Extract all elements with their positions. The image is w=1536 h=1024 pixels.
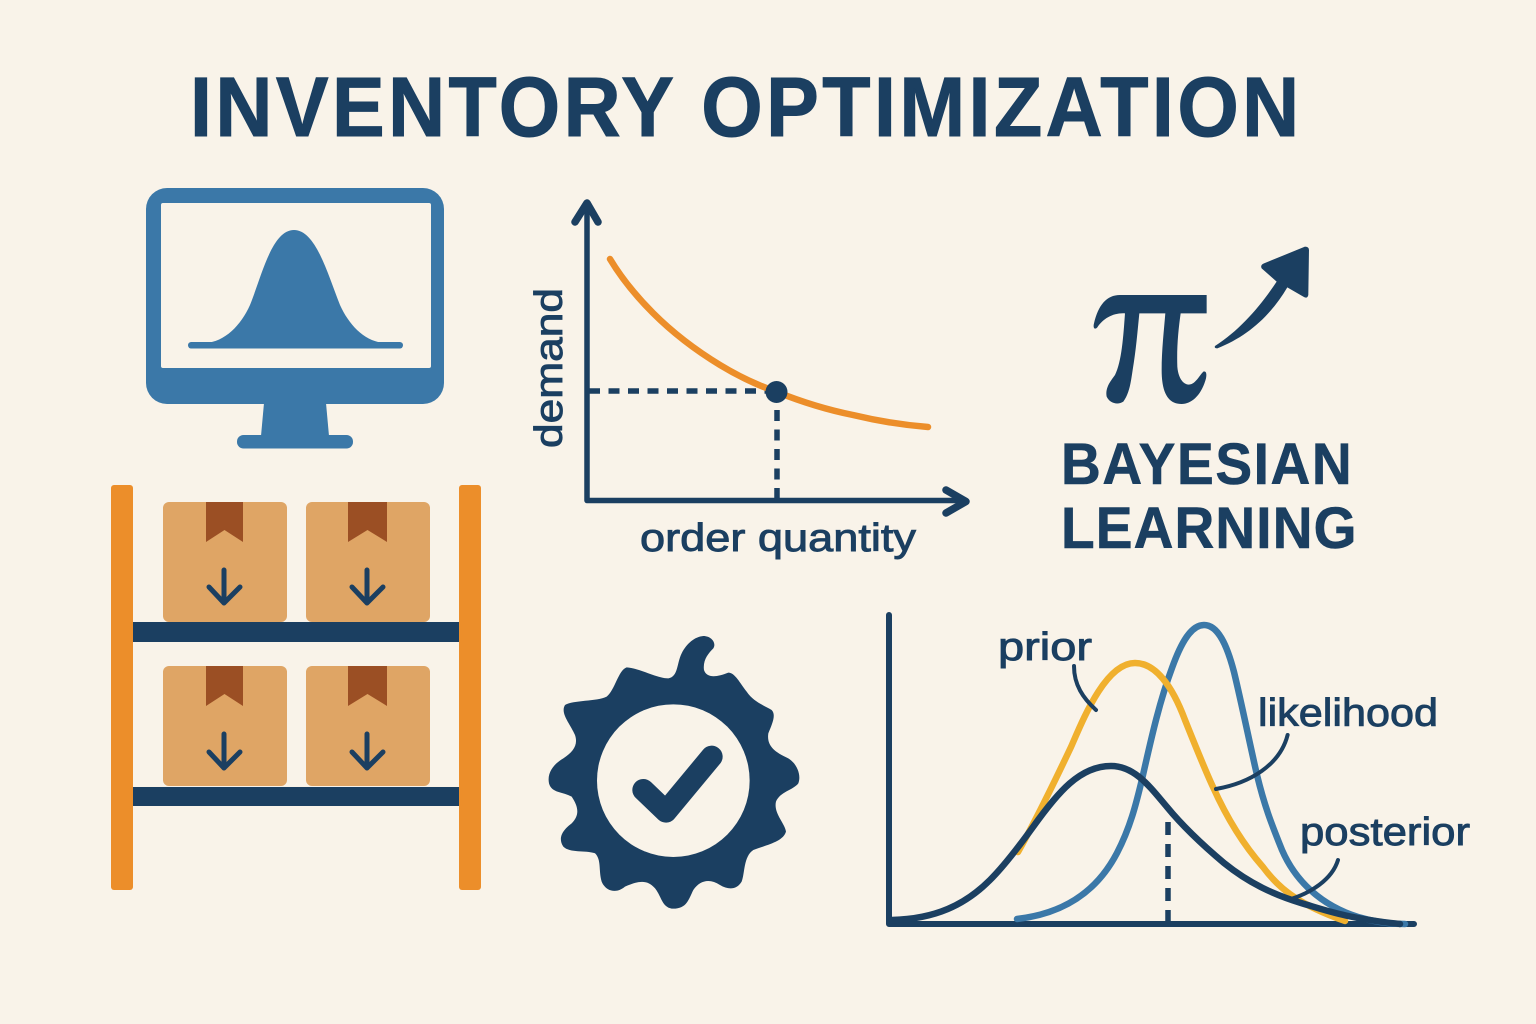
heading: Bayesian learning: LEARNING bbox=[1061, 496, 1356, 560]
posterior leader bbox=[1291, 860, 1338, 899]
lower shelf bbox=[133, 787, 459, 806]
right upright bbox=[459, 485, 481, 890]
warehouse shelf with boxes bbox=[111, 485, 481, 890]
likelihood curve bbox=[1017, 625, 1405, 924]
likelihood leader bbox=[1216, 735, 1288, 789]
upper shelf bbox=[133, 622, 459, 642]
title: INVENTORY OPTIMIZATION bbox=[190, 61, 1299, 155]
left upright bbox=[111, 485, 133, 890]
x axis label: order quantity bbox=[640, 517, 917, 560]
chart: demand vs order quantity bbox=[528, 203, 966, 560]
axes bbox=[587, 203, 965, 500]
likelihood label: likelihood bbox=[1258, 692, 1438, 735]
prior leader bbox=[1074, 666, 1096, 710]
heading: Bayesian learning bbox=[1061, 432, 1356, 560]
icon: pi symbol with rising arrow bbox=[1094, 247, 1309, 404]
arrow bbox=[1215, 247, 1309, 348]
dashed guides bbox=[589, 391, 777, 498]
box: top left bbox=[163, 502, 287, 622]
posterior mean dashed line bbox=[1165, 822, 1171, 922]
posterior label: posterior bbox=[1300, 811, 1470, 854]
y axis label: demand bbox=[528, 288, 571, 448]
icon: gear with check mark bbox=[549, 636, 799, 909]
chart: prior, likelihood, posterior bbox=[889, 615, 1470, 924]
icon: computer monitor with bell curve bbox=[146, 188, 444, 448]
box: bottom left bbox=[163, 666, 287, 786]
demand curve bbox=[610, 259, 928, 427]
box: bottom right bbox=[306, 666, 430, 786]
posterior curve bbox=[892, 766, 1400, 924]
prior label: prior bbox=[998, 626, 1092, 669]
axis arrowheads bbox=[575, 203, 966, 513]
prior curve bbox=[1018, 663, 1345, 921]
optimal point bbox=[766, 381, 788, 403]
box: top right bbox=[306, 502, 430, 622]
pi bbox=[1094, 295, 1207, 404]
heading: Bayesian learning: BAYESIAN bbox=[1061, 432, 1352, 496]
axes bbox=[889, 615, 1414, 924]
